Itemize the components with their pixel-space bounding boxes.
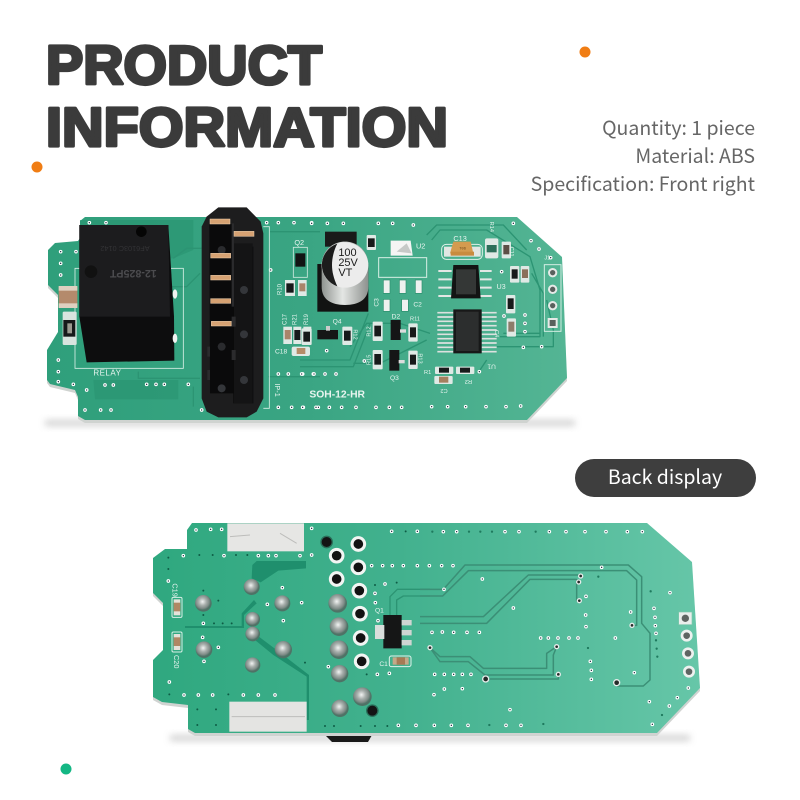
header through holes <box>679 612 694 676</box>
IC U1: U1 <box>487 363 496 370</box>
small resistors: R13 <box>416 353 422 364</box>
small resistor <box>63 312 77 345</box>
silkscreen RELAY label: RELAY <box>93 368 122 377</box>
board front PCB <box>47 217 567 420</box>
through holes with white rings <box>330 538 368 668</box>
U2 regulator pads: C2 <box>413 302 422 309</box>
solder joints <box>195 579 372 717</box>
tantalum capacitor C13: C13 <box>453 234 467 243</box>
relay black body: AF6103C 0142 <box>100 244 150 253</box>
electrolytic capacitor 100 25V VT: 25V <box>338 257 359 269</box>
small resistors: C2 <box>440 387 448 393</box>
transistor Q2 <box>293 238 307 277</box>
small resistors: C11 <box>508 247 514 257</box>
silver pads <box>227 523 307 732</box>
dark ground plane channel <box>185 561 309 720</box>
small resistors: R11 <box>410 317 420 323</box>
resistors and labels R10 C17 R21 R19 C18: R19 <box>304 313 310 325</box>
IC U1 <box>437 309 497 370</box>
back display label pill <box>575 459 756 497</box>
copper pins <box>210 219 254 326</box>
resistors and labels R10 C17 R21 R19 C18: C18 <box>275 348 288 355</box>
transistors D2 Q3 Q4: Q3 <box>390 375 399 382</box>
header J1 through holes <box>544 265 561 331</box>
right half details <box>300 222 561 407</box>
black vias <box>321 536 378 716</box>
capacitor C19 <box>171 583 182 617</box>
small resistors: R14 <box>488 222 494 232</box>
resistors and labels R10 C17 R21 R19 C18: C17 <box>283 313 289 325</box>
product specifications text: Material: ABS <box>635 140 755 169</box>
small resistors: R2 <box>465 378 472 384</box>
small resistors: R12 <box>351 329 357 340</box>
electrolytic capacitor 100 25V VT <box>317 232 368 312</box>
IC U3: U3 <box>497 284 506 291</box>
U2 regulator pads <box>373 241 427 311</box>
small resistors: C4 <box>493 330 499 337</box>
relay black body <box>79 225 174 362</box>
tantalum capacitor C13: T06 <box>459 247 466 251</box>
back display label pill: Back display <box>608 461 722 490</box>
U2 regulator pads: C3 <box>373 298 380 307</box>
U2 regulator pads: U2 <box>416 242 425 251</box>
resistors and labels R10 C17 R21 R19 C18 <box>275 280 311 356</box>
green dot bottom left <box>60 764 72 774</box>
black connector housing <box>202 207 263 417</box>
transistor Q2: Q2 <box>294 238 304 247</box>
capacitor C20 <box>172 632 182 668</box>
transistors D2 Q3 Q4 <box>317 313 406 382</box>
title: INFORMATION <box>46 96 448 158</box>
capacitor C1: C1 <box>379 661 388 668</box>
transistor Q1: Q1 <box>375 608 384 615</box>
product specifications text: Quantity: 1 piece <box>602 112 755 141</box>
left half details <box>58 207 320 417</box>
resistors and labels R10 C17 R21 R19 C18: R21 <box>293 313 299 325</box>
product specifications text <box>531 112 756 197</box>
beige capacitor <box>59 286 77 308</box>
resistors and labels R10 C17 R21 R19 C18: R10 <box>278 283 284 295</box>
title <box>46 34 448 158</box>
transistor Q1 <box>375 608 412 648</box>
ground plane shade <box>80 220 193 399</box>
small resistors: R15 <box>367 355 373 365</box>
capacitor C20: C20 <box>172 655 181 668</box>
silkscreen board name: SOH-12-HR <box>309 390 366 401</box>
small resistors: J1 <box>544 255 550 261</box>
small resistors <box>302 222 550 393</box>
electrolytic capacitor 100 25V VT: 100 <box>338 247 357 259</box>
capacitor C19: C19 <box>171 583 180 597</box>
copper traces <box>300 225 553 370</box>
right half details <box>420 532 694 725</box>
tantalum capacitor C13 <box>442 234 482 259</box>
left half details <box>168 523 430 732</box>
front circuit board photo <box>45 207 575 426</box>
small resistors: R12 <box>367 326 373 337</box>
title: PRODUCT <box>46 34 322 96</box>
connector peeking out underneath <box>325 735 372 742</box>
silkscreen IP-1 label: IP-1 <box>273 383 282 397</box>
copper traces <box>420 565 650 686</box>
orange dot left <box>32 162 42 172</box>
product specifications text: Specification: Front right <box>531 168 756 197</box>
trace end pads <box>428 574 634 686</box>
electrolytic capacitor 100 25V VT: VT <box>338 267 353 279</box>
small resistors: R1 <box>424 370 431 376</box>
IC U3 <box>438 265 506 298</box>
transistors D2 Q3 Q4: Q4 <box>333 319 342 326</box>
back circuit board photo <box>153 523 700 742</box>
capacitor C1 <box>379 656 411 668</box>
orange dot top right <box>580 46 590 58</box>
board back PCB <box>153 523 700 733</box>
transistors D2 Q3 Q4: D2 <box>392 313 400 320</box>
relay black body: 12-825PT <box>109 267 157 279</box>
silkscreen relay outline <box>75 268 183 368</box>
